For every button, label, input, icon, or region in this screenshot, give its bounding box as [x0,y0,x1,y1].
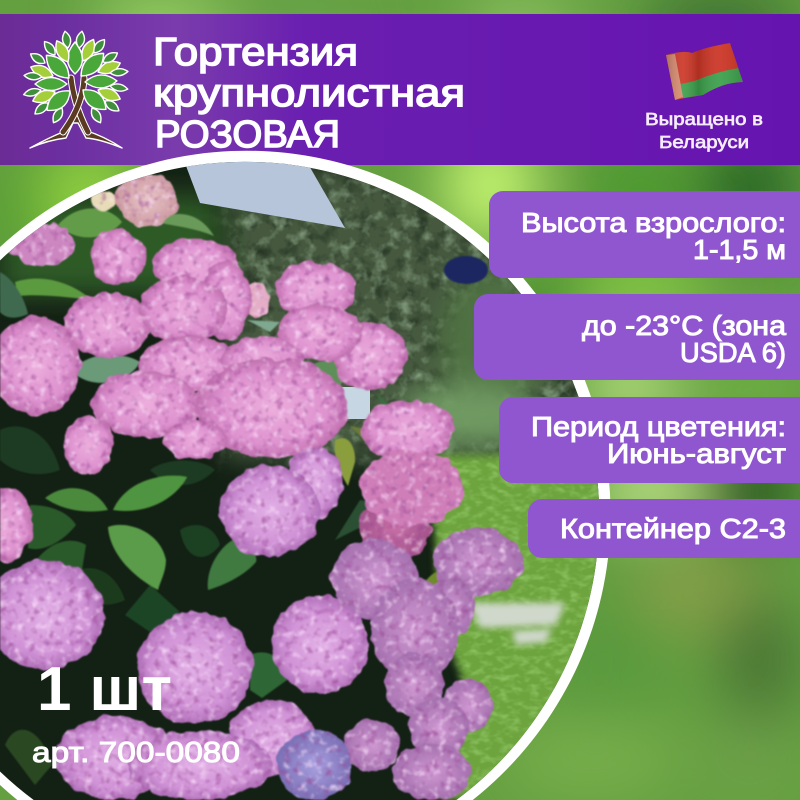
panel: container [528,499,800,558]
icon: Belarus flag [666,43,743,100]
round plant photo [0,150,620,800]
photo: pale box [340,387,370,419]
panel: flowering period: Период цветения: [531,411,786,442]
panel: frost hardiness: до -23°С (зона [582,310,787,341]
logo: large green leaves [35,42,117,116]
photo: hydrangea flower heads [0,173,523,800]
photo: dark blue object [444,256,488,284]
purple header band [0,14,800,165]
made in Belarus label: Выращено в [645,109,763,129]
title: Гортензия [153,31,358,74]
logo: trunk strands [63,78,88,132]
made in Belarus label: Беларуси [659,132,749,152]
title: РОЗОВАЯ [155,114,340,156]
title: крупнолистная [153,72,465,115]
logo: small outer leaves [23,31,128,125]
photo: garden backdrop [0,150,620,800]
photo: roof [186,162,345,228]
logo: tree [23,31,128,148]
panel: height: 1-1,5 м [693,234,786,265]
logo: lime leaves [29,37,122,106]
panel: frost hardiness [474,294,800,380]
panel: height [489,191,800,278]
panel: frost hardiness: USDA 6) [680,337,786,368]
article number: арт. 700-0080 [32,737,240,769]
photo: leaves [0,208,462,785]
quantity label: 1 шт [37,655,172,724]
logo: roots [30,112,122,148]
title [153,31,465,156]
panel: flowering period: Июнь-август [607,438,786,469]
white circle frame [0,151,611,800]
panel: flowering period [499,397,800,483]
panel: height: Высота взрослого: [521,207,786,238]
panel: container: Контейнер С2-3 [560,513,786,544]
made in Belarus label [645,109,763,152]
